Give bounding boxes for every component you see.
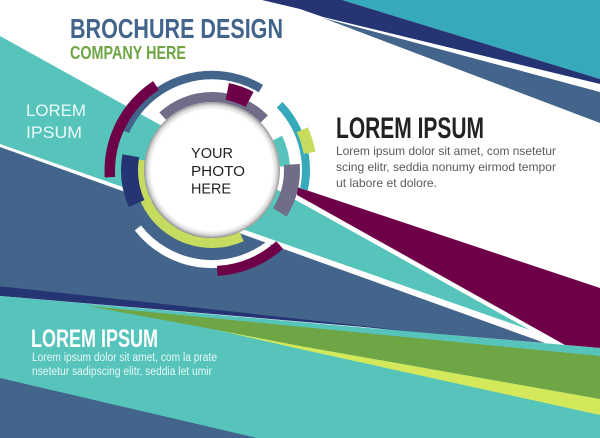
band: maroon diagonal (297, 187, 600, 348)
band: navy (262, 0, 600, 84)
block: maroon top (227, 92, 250, 99)
left label: lorem ipsum (26, 101, 86, 142)
arc: teal inner right (278, 138, 285, 166)
band: steel blue sliver (323, 18, 600, 123)
arc: blue outer (125, 75, 261, 131)
lower text block (31, 325, 217, 378)
block: grey right (280, 164, 292, 212)
photo placeholder text: PHOTO (191, 163, 245, 180)
arc: lime inner bottom (139, 160, 242, 243)
paragraph: ut labore et dolore. (336, 176, 437, 190)
paragraph: scing elitr, seddia nonumy eirmod tempor (336, 160, 556, 174)
left label: lorem ipsum: LOREM (26, 101, 86, 120)
arc: maroon bottom (217, 245, 280, 271)
block: navy left (130, 156, 137, 204)
band: lower teal field (0, 296, 600, 438)
paragraph (336, 144, 556, 190)
band: lime wedge (217, 330, 600, 415)
block: lime right (302, 130, 310, 153)
band: green wedge (88, 306, 600, 399)
left label: lorem ipsum: IPSUM (26, 123, 82, 142)
heading: brochure design: BROCHURE DESIGN (70, 13, 283, 44)
top right colour bands (262, 0, 600, 123)
lower colour bands (0, 296, 600, 438)
photo placeholder circle (144, 102, 280, 238)
heading: lorem ipsum lower: LOREM IPSUM (31, 325, 158, 353)
photo placeholder text: YOUR (191, 145, 233, 162)
paragraph lower: Lorem ipsum dolor sit amet, com la prate (32, 352, 217, 364)
band: steel blue field (0, 147, 545, 343)
right text block (336, 112, 556, 190)
arc: white bottom (138, 228, 270, 264)
heading: lorem ipsum: LOREM IPSUM (336, 112, 484, 145)
left and centre diagonal bands (0, 36, 600, 348)
band: teal corner (342, 0, 600, 79)
paragraph: Lorem ipsum dolor sit amet, com nsetetur (336, 144, 556, 158)
photo placeholder text (191, 145, 245, 198)
arc: maroon outer left (110, 86, 156, 177)
circular photo frame (110, 75, 309, 271)
subheading: company here: COMPANY HERE (70, 43, 186, 63)
photo placeholder text: HERE (191, 180, 231, 198)
band: bottom left blue (0, 378, 257, 438)
band: teal diagonal (0, 36, 530, 330)
paragraph lower: nsetetur sadipscing elitr, seddia let umir (32, 366, 212, 378)
band: navy sliver (0, 286, 400, 330)
arc: grey inner top (163, 97, 264, 119)
paragraph lower (32, 352, 217, 378)
arc: teal right (280, 105, 306, 190)
title block (70, 13, 283, 63)
